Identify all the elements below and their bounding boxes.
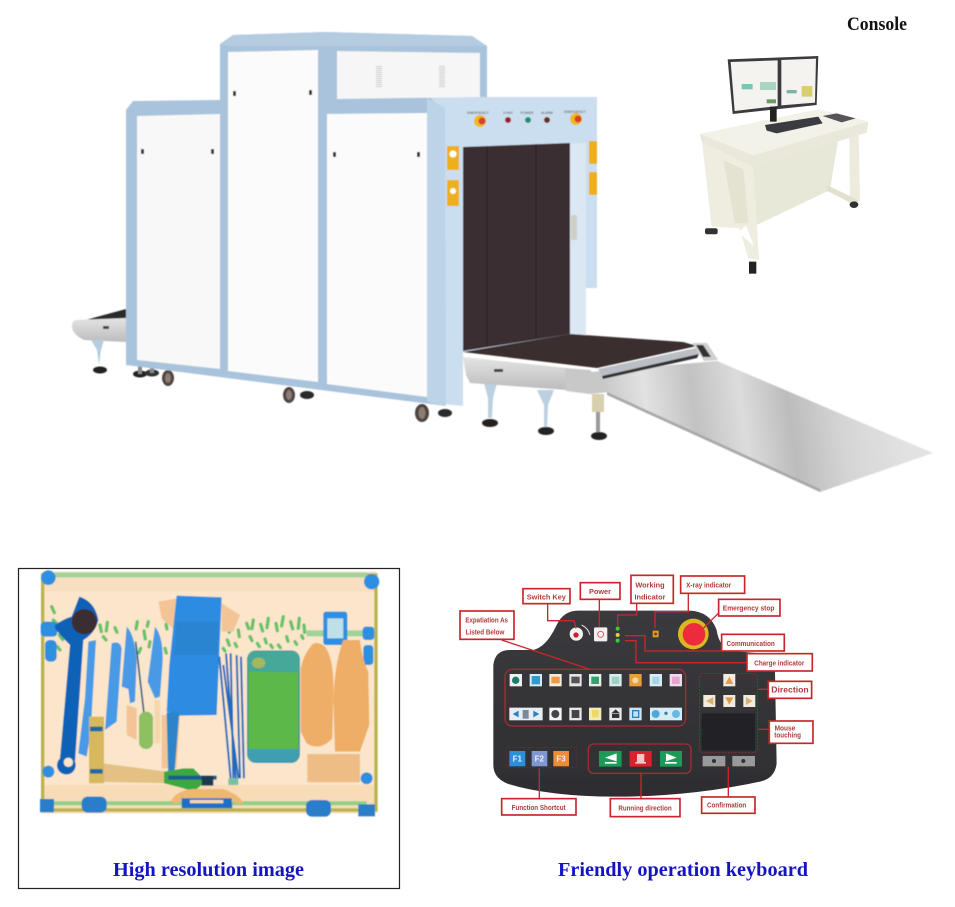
emergency stop button xyxy=(678,619,709,649)
touchpad xyxy=(702,713,755,751)
keyboard body xyxy=(493,611,777,797)
F keys: F3 xyxy=(556,755,566,764)
callout: emergency stop xyxy=(719,599,780,616)
hinge bar and lock xyxy=(89,717,217,792)
blue knives xyxy=(78,627,163,757)
console desk xyxy=(700,56,868,274)
callout: confirmation: Confirmation xyxy=(707,800,747,809)
phone xyxy=(248,651,299,762)
running direction keys xyxy=(599,751,682,767)
callout: switch key: Switch Key xyxy=(527,592,567,601)
indicator panel: ALARM xyxy=(541,111,553,115)
callout: communication xyxy=(722,634,784,651)
callout: emergency stop: Emergency stop xyxy=(723,604,775,613)
callout: working indicator: Indicator xyxy=(635,592,666,601)
mouse buttons xyxy=(703,756,755,766)
monitors xyxy=(728,56,818,122)
keyboard xyxy=(765,117,823,133)
indicator panel: POWER xyxy=(521,111,534,115)
callout: working indicator: Working xyxy=(635,580,665,589)
screws xyxy=(141,90,420,157)
F keys xyxy=(509,751,569,766)
white panel: right xyxy=(327,113,427,397)
indicator panel xyxy=(467,110,587,127)
ramp xyxy=(590,361,933,492)
panel frame xyxy=(18,568,400,888)
callout: expatiation xyxy=(460,611,514,639)
key switch xyxy=(570,625,590,641)
roller xyxy=(598,343,718,379)
indicator lights xyxy=(616,627,659,643)
callout: charge indicator: Charge indicator xyxy=(754,658,804,667)
callout: direction: Direction xyxy=(771,684,809,694)
bundle of rods xyxy=(219,653,244,785)
operation keyboard diagram xyxy=(460,575,813,881)
leader lines xyxy=(502,593,769,798)
machine frame xyxy=(126,32,487,406)
callout: working indicator xyxy=(631,575,673,603)
x-ray scan xyxy=(40,570,379,817)
key group outlines xyxy=(505,669,758,773)
desk legs and back panel xyxy=(702,130,860,274)
knife handles xyxy=(136,642,160,749)
callout: mouse touching: Mouse xyxy=(775,723,795,732)
direction keys xyxy=(703,674,755,707)
callout: x-ray indicator xyxy=(681,576,745,593)
callout: mouse touching xyxy=(769,721,813,743)
corner clasps xyxy=(40,570,379,817)
callout: charge indicator xyxy=(747,654,812,671)
callout: power xyxy=(580,583,620,599)
callout: function shortcut xyxy=(502,799,576,815)
cleaver xyxy=(167,596,222,780)
callout: power: Power xyxy=(589,587,611,596)
tray xyxy=(823,113,856,122)
front legs xyxy=(482,383,607,440)
callout: expatiation: Expatiation As xyxy=(465,616,508,625)
F keys: F1 xyxy=(513,755,523,764)
callout: mouse touching: touching xyxy=(774,731,801,740)
callout: function shortcut: Function Shortcut xyxy=(512,803,566,812)
F keys: F2 xyxy=(535,755,545,764)
callout: direction xyxy=(768,681,812,698)
top highlight band xyxy=(220,32,487,46)
orange shadows xyxy=(127,598,240,768)
white panel: top xyxy=(337,51,480,99)
caption: friendly operation keyboard: Friendly operation keyboard xyxy=(558,859,809,881)
title: Console: Console xyxy=(847,15,907,35)
caption: high resolution image: High resolution image xyxy=(113,859,304,881)
callout: x-ray indicator: X-ray indicator xyxy=(686,580,731,589)
box xyxy=(307,754,360,782)
vents xyxy=(379,66,442,87)
callout: communication: Communication xyxy=(726,639,775,648)
callout: expatiation: Listed Below xyxy=(466,627,505,636)
function key row 1 xyxy=(510,674,682,686)
indicator panel: EMERGENCY xyxy=(467,111,490,115)
x-ray image panel xyxy=(18,568,400,888)
white panel: center xyxy=(228,50,318,382)
left feeder conveyor xyxy=(72,309,126,374)
function key row 2 xyxy=(509,708,682,720)
bottles xyxy=(301,640,369,752)
white panel: left xyxy=(137,114,220,369)
callout: running direction: Running direction xyxy=(618,803,672,812)
green speckle band xyxy=(52,607,305,653)
tunnel face xyxy=(427,97,597,406)
desk top xyxy=(700,109,868,167)
power button xyxy=(594,627,607,641)
tunnel xyxy=(463,143,577,351)
indicator panel: EMERGENCY xyxy=(564,110,587,114)
exit conveyor xyxy=(463,334,697,394)
warning stickers xyxy=(447,141,597,206)
feet and casters xyxy=(133,365,452,422)
indicator panel: X-RAY xyxy=(503,111,514,115)
callout: running direction xyxy=(610,799,680,817)
case handle xyxy=(171,789,243,808)
callout: switch key xyxy=(523,589,570,604)
case border xyxy=(43,575,376,810)
ramp underside edge xyxy=(607,392,820,492)
adjustable wrench xyxy=(55,597,98,774)
scanner machine xyxy=(72,32,933,492)
callout: confirmation xyxy=(702,797,755,813)
